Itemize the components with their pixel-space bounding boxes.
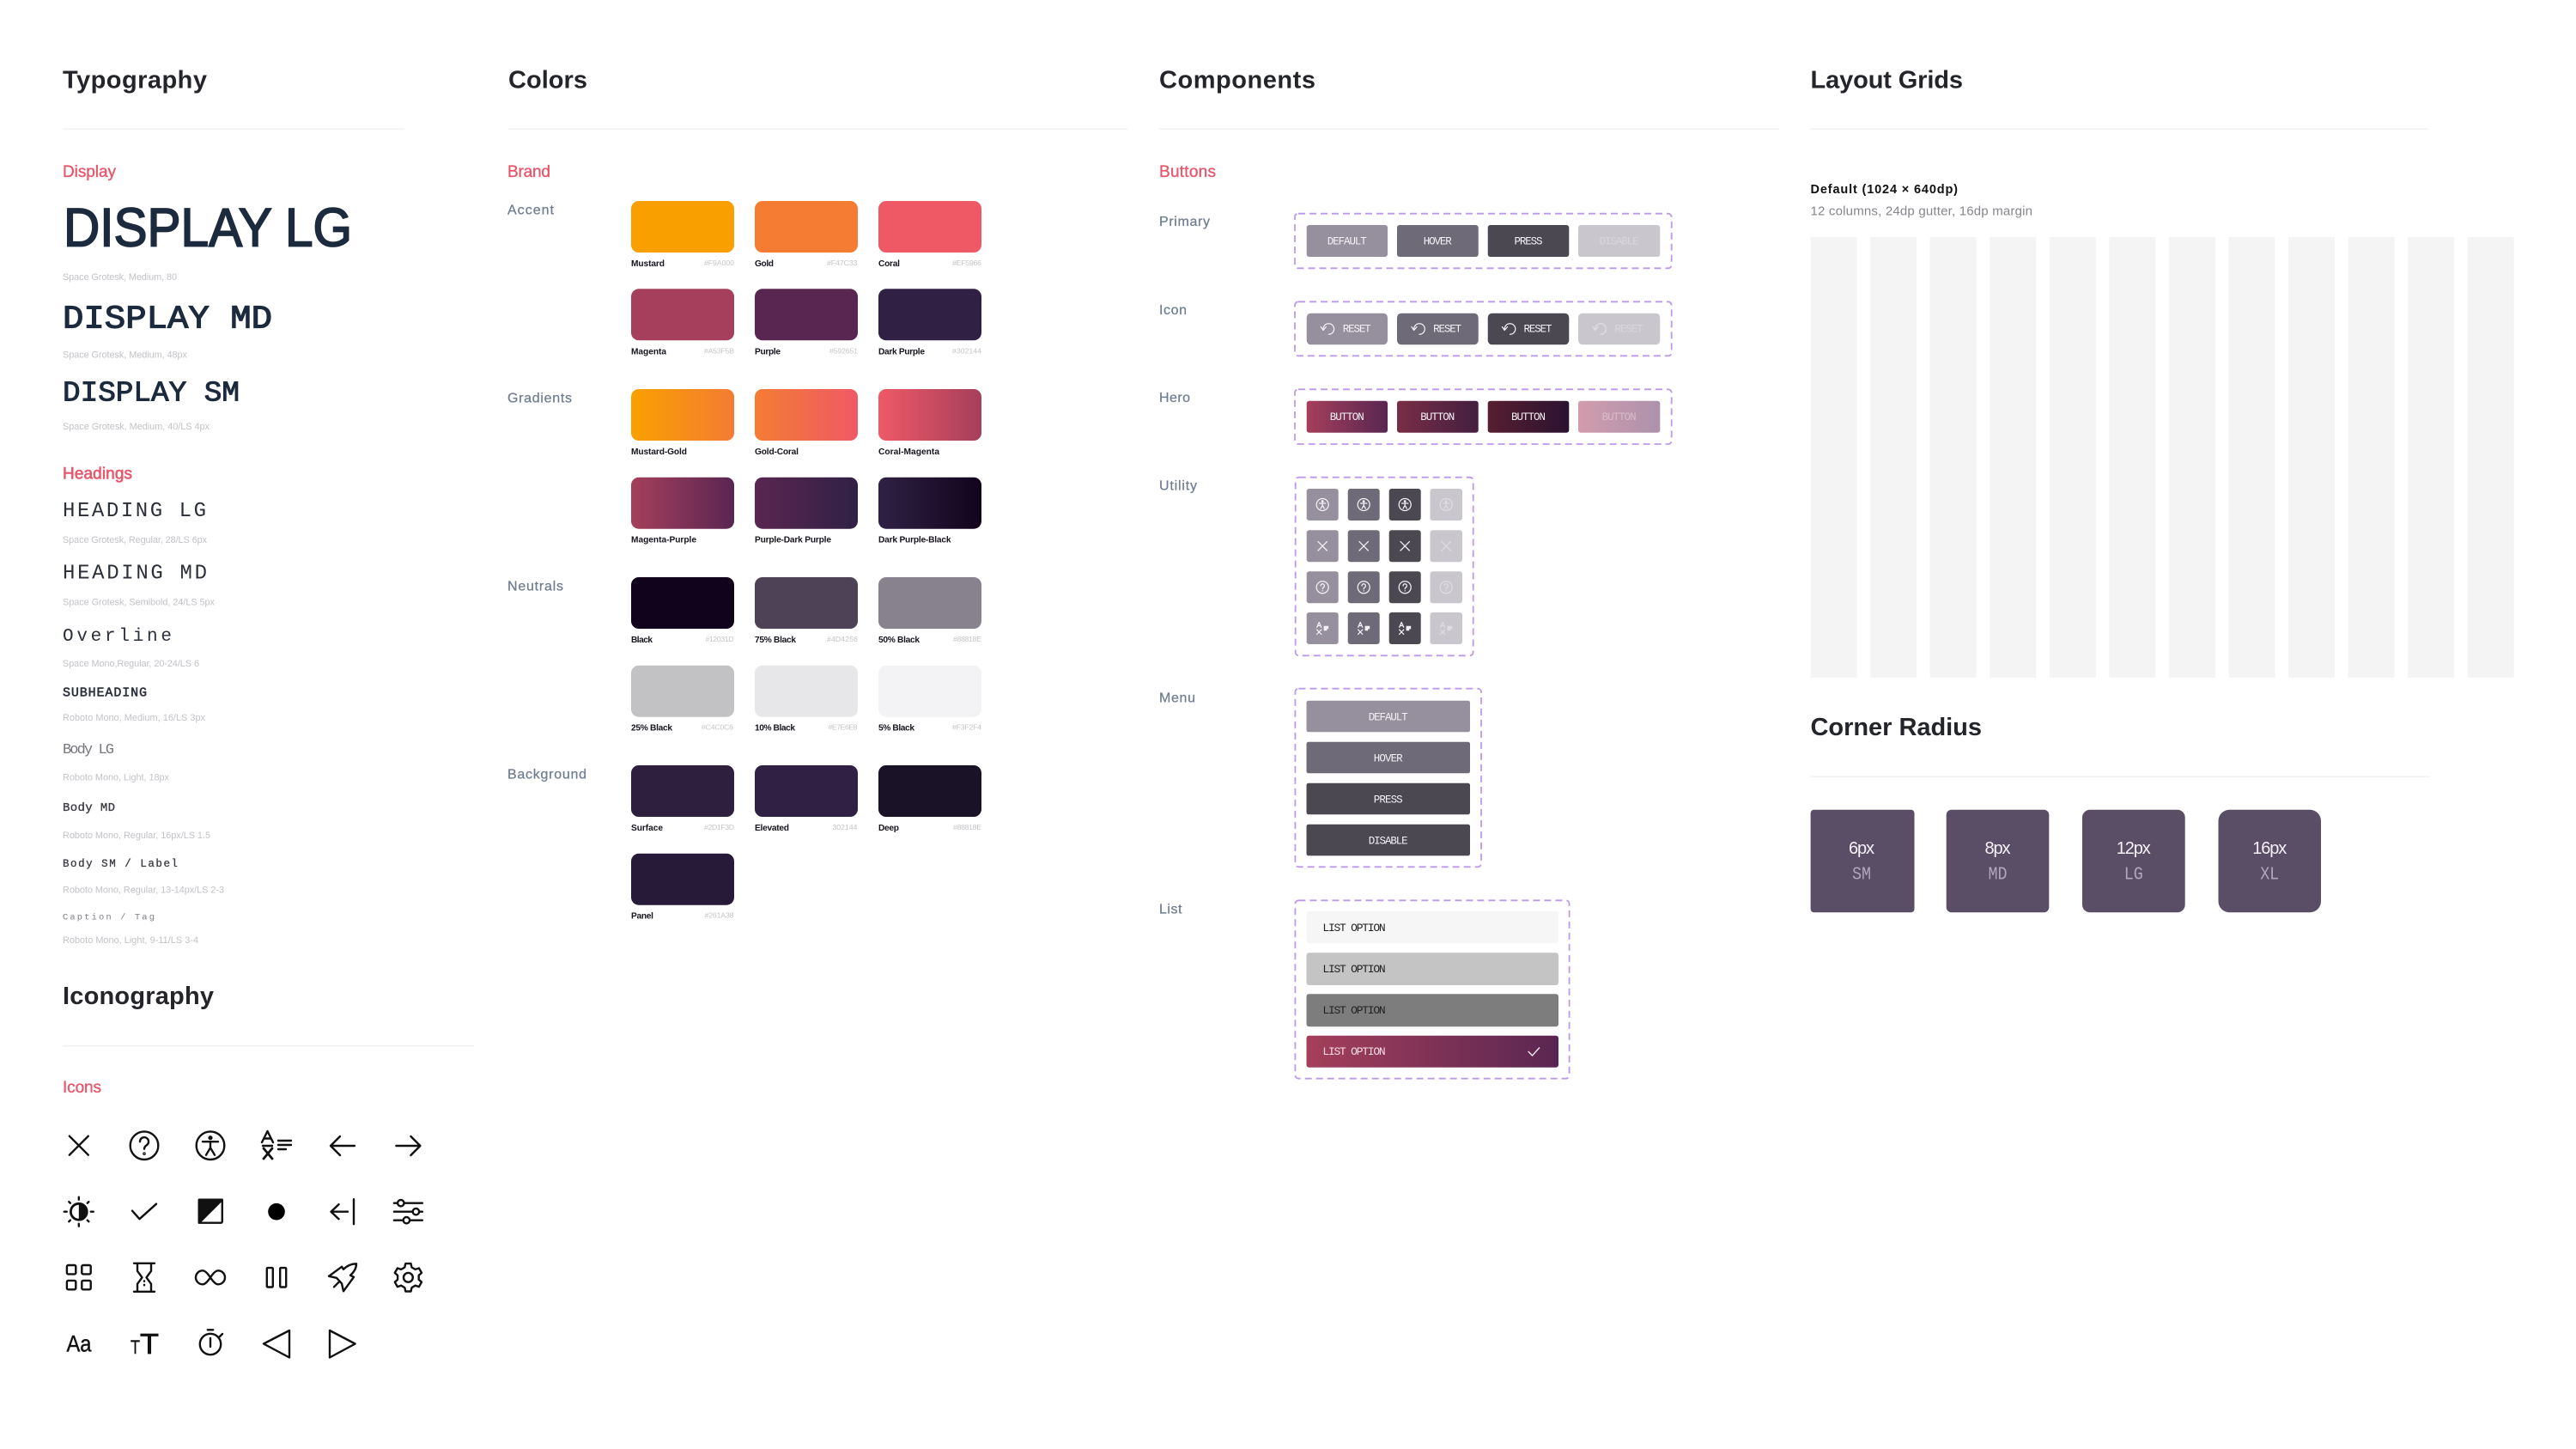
button group: hero: BUTTON [1511,411,1546,423]
icon: text size [131,1328,159,1360]
label: List: List [1159,902,1182,916]
button group: hero: BUTTON [1602,411,1637,423]
swatch: Deep: #88818E [953,823,981,831]
swatch: 25% Black: #C4C0C6 [702,723,733,732]
button group: primary: HOVER [1424,235,1452,247]
icon: rocket [329,1263,356,1291]
radius tile: 16px: XL [2260,865,2279,885]
button group: utility [1296,478,1473,655]
swatch: 5% Black: 5% Black [878,724,914,734]
swatch: Elevated: 302144 [833,823,858,831]
label: Menu: Menu [1159,691,1195,705]
icon: check [132,1204,156,1219]
swatch: 25% Black [631,666,734,734]
swatch: 10% Black: #E7E6E8 [828,723,858,732]
swatch: Surface: Surface [631,824,663,833]
radius tile: 8px: 8px [1985,839,2011,858]
swatch: Dark Purple: #302144 [952,346,981,355]
label: Icon: Icon [1159,303,1187,318]
swatch: Purple [755,289,858,356]
button group: hero [1295,389,1672,444]
button group: primary [1295,214,1672,268]
swatch: Surface: #2D1F3D [704,823,734,831]
label: Neutrals: Neutrals [507,580,563,594]
icon: arrow to bar [331,1199,354,1224]
swatch: 50% Black: 50% Black [878,636,920,645]
panel: colors [507,67,1127,922]
type note: Roboto Mono, Light, 9-11/LS 3-4 [63,935,198,946]
icon: accessibility [197,1131,224,1160]
type sample: Body SM / Label: Body SM / Label [63,858,178,870]
icon: arrow right [396,1136,420,1155]
swatch: 50% Black [878,577,981,645]
type note: Space Grotesk, Semibold, 24/LS 5px [63,598,216,608]
icon: pause [267,1268,286,1287]
menu group: DISABLE [1369,835,1408,847]
swatch: 75% Black: #4D4256 [827,635,858,643]
heading: Typography: Typography [63,67,207,94]
type sample: Caption / Tag: Caption / Tag [63,912,155,922]
icon: help [131,1131,158,1160]
swatch: Gold [755,201,858,269]
swatch: Magenta-Purple: Magenta-Purple [631,536,696,545]
type note: Roboto Mono, Regular, 13-14px/LS 2-3 [63,886,224,896]
type sample: Display SM: DISPLAY SM [63,378,240,410]
radius tile: 12px [2082,810,2185,912]
grid title: Default (1024 × 640dp) [1810,183,1958,197]
utility row: close [1307,530,1462,562]
swatch: Magenta [631,289,734,356]
swatch: Mustard: #F9A000 [704,259,734,267]
button group: hero: BUTTON [1420,411,1455,423]
type sample: Display MD: DISPLAY MD [63,301,272,338]
list group [1295,900,1570,1079]
utility row: help [1307,571,1462,603]
list group: LIST OPTION [1322,1004,1386,1017]
label: Buttons: Buttons [1159,163,1216,181]
menu group: PRESS [1374,794,1403,806]
icon: grid [67,1265,91,1289]
radius tile: 6px: 6px [1849,839,1874,858]
icon: infinity [196,1270,225,1284]
icon: sliders [394,1200,422,1223]
label: Gradients: Gradients [507,392,572,406]
type sample: Heading MD: HEADING MD [63,562,207,585]
button group: icon: RESET [1343,324,1371,336]
swatch: 10% Black: 10% Black [755,724,795,734]
button group: icon: RESET [1523,324,1552,336]
swatch: Gold-Coral: Gold-Coral [755,447,799,457]
swatch: 10% Black [755,666,858,734]
icon: triangle right [330,1330,355,1357]
type sample: Heading LG: HEADING LG [63,500,206,523]
swatch: Purple: Purple [755,347,781,356]
swatch: Mustard-Gold: Mustard-Gold [631,447,687,457]
heading: Iconography: Iconography [63,983,214,1010]
type sample: Overline: Overline [63,627,172,647]
radius tile: 8px: MD [1989,865,2008,885]
swatch: Mustard [631,201,734,269]
type note: Roboto Mono, Medium, 16/LS 3px [63,713,206,723]
button group: hero: BUTTON [1330,411,1364,423]
button group: primary: DISABLE [1600,235,1639,247]
type sample: Subheading: SUBHEADING [63,686,147,701]
swatch: 5% Black [878,666,981,734]
type sample: Body LG: Body LG [63,742,114,758]
radius tile: 16px [2219,810,2321,912]
utility row: translate [1307,612,1462,644]
swatch: Deep [878,765,981,833]
list group: LIST OPTION [1322,1045,1386,1058]
swatch: Coral-Magenta: Coral-Magenta [878,447,939,457]
grid columns [1810,237,2514,678]
swatch: Coral-Magenta [878,389,981,457]
swatch: Elevated [755,765,858,833]
swatch: Purple: #592651 [829,346,858,355]
button group: icon: RESET [1614,324,1643,336]
swatch: Dark Purple: Dark Purple [878,347,925,356]
icon: font Aa: Aa [67,1330,92,1356]
swatch: Dark Purple-Black: Dark Purple-Black [878,536,951,545]
icon: triangle left [264,1330,289,1357]
utility row: accessibility [1307,489,1462,521]
label: Primary: Primary [1159,215,1210,229]
label: Hero: Hero [1159,391,1190,405]
heading: Corner Radius: Corner Radius [1810,714,1982,741]
swatch: Coral: #EF5966 [952,259,981,267]
radius tile: 12px: LG [2124,865,2143,885]
radius tile: 6px: SM [1852,865,1871,885]
grid description: 12 columns, 24dp gutter, 16dp margin [1810,204,2032,219]
radius tile: 12px: 12px [2117,839,2151,858]
swatch: Deep: Deep [878,824,899,833]
swatch: Dark Purple-Black [878,478,981,545]
heading: Colors: Colors [508,67,587,94]
panel: iconography [63,983,474,1360]
icon: text size: T [140,1328,159,1360]
icon: dot [268,1203,285,1220]
heading: Components: Components [1159,67,1315,94]
icon: text size: T [131,1336,140,1358]
swatch: Gold: Gold [755,259,774,269]
swatch: Black: Black [631,636,653,645]
swatch: Panel: #261A38 [704,911,734,920]
swatch: Panel: Panel [631,912,653,922]
panel: components [1159,67,1779,1079]
swatch: Dark Purple [878,289,981,356]
swatch: Magenta: #A53F5B [704,346,734,355]
type note: Space Grotesk, Medium, 48px [63,350,188,361]
icon: hourglass [134,1263,155,1292]
menu group [1295,689,1481,867]
swatch: Purple-Dark Purple: Purple-Dark Purple [755,536,831,545]
swatch: Surface [631,765,734,833]
type note: Roboto Mono, Regular, 16px/LS 1.5 [63,831,210,841]
radius tile: 16px: 16px [2252,839,2287,858]
label: Accent: Accent [507,203,555,217]
panel: layout grids [1810,67,2514,678]
icon: close [70,1136,88,1155]
radius tile: 8px [1947,810,2049,912]
label: Brand: Brand [507,163,550,181]
icon: arrow left [331,1136,355,1155]
swatch: 75% Black [755,577,858,645]
list group: LIST OPTION [1322,963,1386,976]
button group: primary: PRESS [1515,235,1542,247]
label: Headings: Headings [63,466,132,483]
swatch: Gold-Coral [755,389,858,457]
icon: list check [1528,1048,1540,1056]
type note: Roboto Mono, Light, 18px [63,773,170,783]
type sample: Body MD: Body MD [63,801,115,815]
type note: Space Mono,Regular, 20-24/LS 6 [63,659,199,669]
heading: Layout Grids: Layout Grids [1810,67,1963,94]
icon: translate [262,1131,291,1159]
swatch: Mustard: Mustard [631,259,665,269]
label: Icons: Icons [63,1079,101,1097]
swatch: Magenta: Magenta [631,347,666,356]
button group: primary: DEFAULT [1327,235,1367,247]
swatch: Coral [878,201,981,269]
swatch: 75% Black: 75% Black [755,636,796,645]
swatch: Black: #12031D [706,635,733,643]
menu group: DEFAULT [1369,711,1408,723]
swatch: Panel [631,854,734,922]
label: Display: Display [63,163,117,181]
type note: Space Grotesk, Regular, 28/LS 6px [63,535,208,545]
button group: icon: RESET [1433,324,1462,336]
label: Utility: Utility [1159,479,1197,494]
type note: Space Grotesk, Medium, 40/LS 4px [63,422,210,432]
type sample: Display LG: DISPLAY LG [64,198,352,259]
radius tile: 6px [1811,810,1915,912]
swatch: Magenta-Purple [631,478,734,545]
swatch: Black [631,577,734,645]
menu group: HOVER [1374,752,1403,764]
type note: Space Grotesk, Medium, 80 [63,272,177,283]
swatch: Mustard-Gold [631,389,734,457]
swatch: Coral: Coral [878,259,900,269]
icon: brightness [64,1197,94,1227]
icon: stopwatch [200,1330,222,1355]
swatch: Purple-Dark Purple [755,478,858,545]
icon: settings [395,1263,422,1292]
swatch: Elevated: Elevated [755,824,789,833]
swatch: 50% Black: #88818E [953,635,981,643]
panel: corner radius [1810,714,2430,912]
swatch: Gold: #F47C33 [827,259,858,267]
swatch: 5% Black: #F3F2F4 [952,723,981,732]
panel: typography [63,67,404,946]
list group: LIST OPTION [1322,922,1386,935]
label: Background: Background [507,768,586,782]
icon: contrast square [199,1200,222,1223]
button group: icon [1295,301,1672,356]
swatch: 25% Black: 25% Black [631,724,672,734]
